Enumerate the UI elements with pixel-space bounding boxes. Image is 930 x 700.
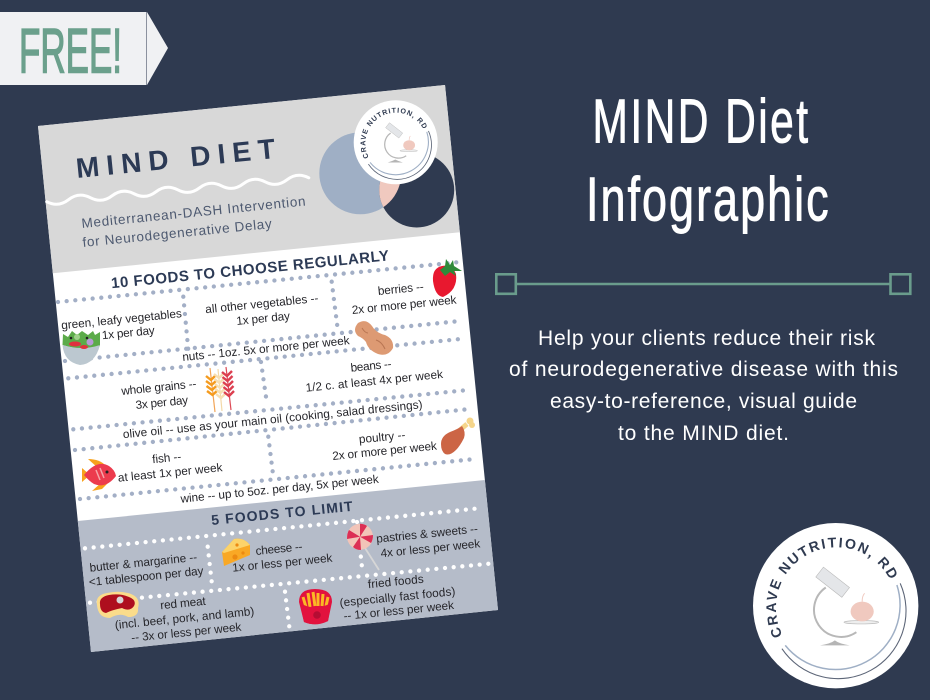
section heading: 10 foods: 10 FOODS TO CHOOSE REGULARLY [110, 247, 390, 292]
subtitle: for Neurodegenerative Delay [82, 216, 273, 250]
food text: all other vegetables: all other vegetables -- [205, 291, 319, 316]
body text: easy-to-reference, visual guide [550, 390, 857, 413]
food text: poultry: 2x or more per week [332, 439, 438, 463]
flyer title: MIND DIET [74, 132, 283, 184]
food text: fried foods [339, 572, 456, 623]
food text: berries: 2x or more per week [351, 293, 457, 317]
food text: whole grains: whole grains -- [120, 376, 197, 398]
food text: wine: wine -- up to 5oz. per day, 5x per week [179, 472, 379, 506]
food text: red meat: (incl. beef, pork, and lamb) [114, 604, 255, 632]
icon: fries [299, 589, 332, 624]
food text: fish: fish -- [152, 449, 182, 466]
food text: cheese: 1x or less per week [232, 551, 333, 575]
body text: Help your clients reduce their risk [538, 327, 876, 350]
food text: poultry [332, 428, 438, 463]
wavy underline [46, 174, 309, 205]
logo: large badge [753, 523, 918, 688]
food text: poultry: poultry -- [358, 428, 406, 446]
food text: all other vegetables [205, 291, 319, 328]
logo: small badge [354, 100, 438, 184]
food text: nuts: nuts -- 1oz. 5x or more per week [182, 333, 350, 364]
food text: cheese [232, 539, 333, 575]
food text: fried foods: (especially fast foods) [339, 584, 456, 610]
ribbon: FREE! [0, 12, 168, 86]
food text: all other vegetables: 1x per day [236, 309, 291, 328]
food text: fish [117, 449, 223, 485]
logo: small badge: CRAVE NUTRITION, RD [360, 108, 427, 158]
subtitle [81, 194, 306, 250]
icon: steak [97, 592, 139, 618]
food text: berries [351, 279, 457, 317]
dotted grid: regular foods [58, 262, 475, 499]
section heading: 5 foods: 5 FOODS TO LIMIT [210, 498, 354, 528]
main title: Infographic [586, 164, 829, 234]
food text: butter and margarine: butter & margarine -- [89, 550, 198, 575]
icon: cheese [222, 539, 250, 566]
flyer: MIND Diet page [38, 85, 498, 652]
food text: beans: beans -- [350, 357, 392, 375]
icon: drumstick [441, 418, 475, 454]
food text: pastries and sweets: 4x or less per week [380, 536, 481, 560]
icon: salad bowl [62, 331, 100, 365]
subtitle: Mediterranean-DASH Intervention [81, 194, 306, 231]
venn circles [319, 132, 454, 228]
logo: large badge: CRAVE NUTRITION, RD [766, 538, 896, 638]
icon: fish [82, 459, 116, 491]
body text [509, 327, 898, 445]
food text: berries: berries -- [377, 279, 424, 298]
food text: fried foods: fried foods [367, 572, 424, 591]
food text: beans: 1/2 c. at least 4x per week [305, 367, 444, 395]
main title [586, 88, 829, 234]
food text: green leafy vegetables: 1x per day [101, 323, 155, 342]
divider with square ends [496, 274, 910, 294]
food text: red meat [114, 594, 255, 645]
food text: green leafy vegetables: green, leafy vegetables [61, 306, 182, 332]
food text: whole grains: 3x per day [135, 393, 189, 412]
icon: peanut [355, 321, 393, 355]
limit panel [78, 480, 498, 652]
food text: fried foods: -- 1x or less per week [343, 598, 455, 623]
dotted grid: limit foods [85, 508, 493, 627]
food text: whole grains [120, 376, 197, 412]
ribbon: FREE!: FREE! [19, 16, 122, 86]
body text: of neurodegenerative disease with this [509, 358, 898, 381]
icon: wheat [206, 367, 234, 412]
body text: to the MIND diet. [618, 422, 789, 445]
food text: olive oil: olive oil -- use as your main oil (cooking, salad dressings) [122, 397, 423, 441]
food text: pastries and sweets [376, 522, 481, 560]
food text: pastries and sweets: pastries & sweets -- [376, 522, 479, 546]
main title: MIND Diet [592, 88, 808, 157]
food text: fish: at least 1x per week [117, 460, 223, 485]
food text: red meat: -- 3x or less per week [131, 620, 242, 645]
icon: lollipop [347, 524, 379, 570]
icon: strawberry [433, 259, 462, 297]
food text: butter and margarine [88, 550, 204, 589]
food text: cheese: cheese -- [255, 539, 303, 558]
food text: butter and margarine: <1 tablespoon per day [88, 564, 204, 589]
food text: red meat: red meat [160, 594, 207, 612]
page background [38, 85, 498, 652]
header panel [38, 85, 460, 274]
